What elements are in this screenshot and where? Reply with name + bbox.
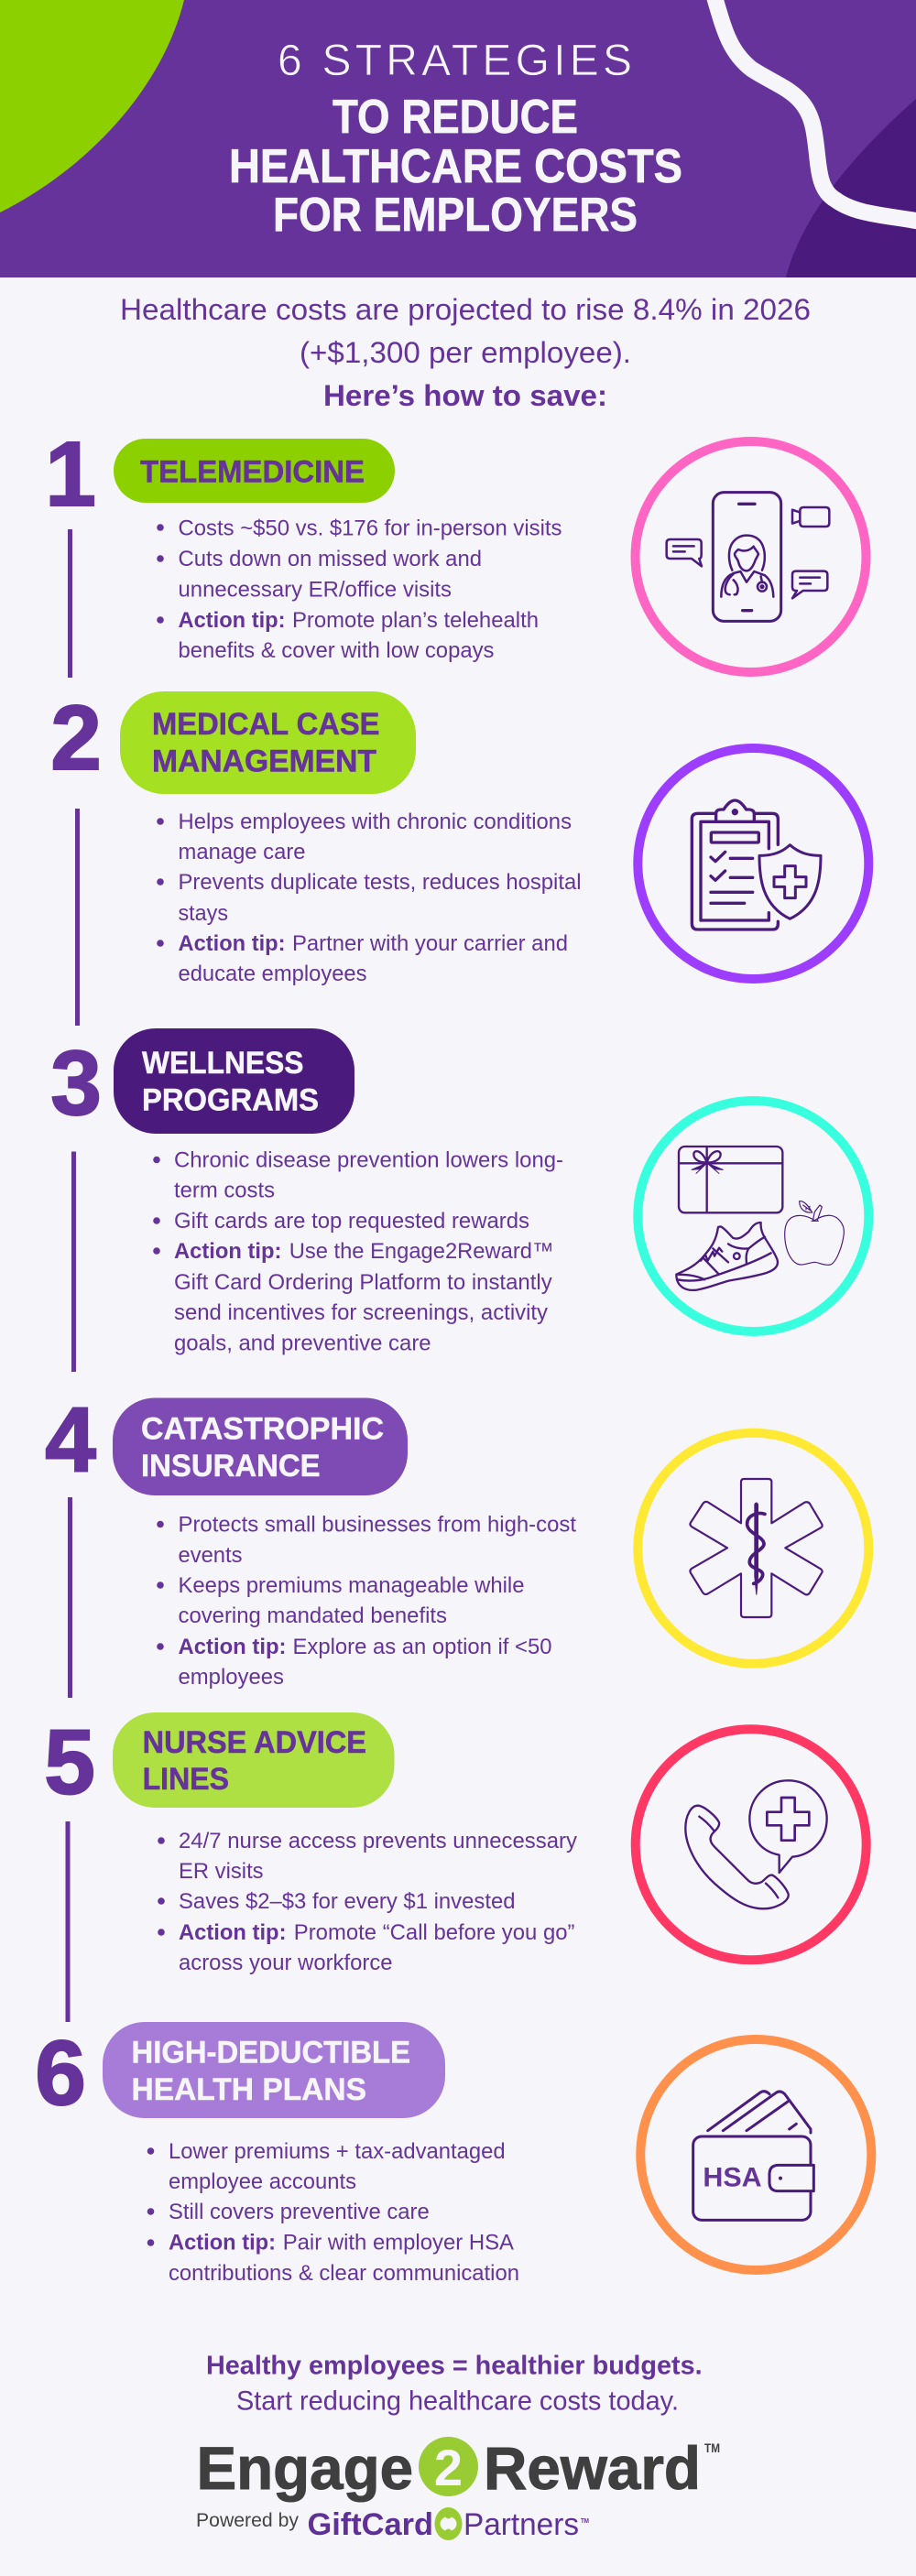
panel: strategy 6 high-deductible health plans [35,2022,871,2286]
logo: powered by GiftCard Partners: GiftCard [308,2507,433,2542]
bullet list 4: events [178,1543,242,1568]
bullet list 2 [157,810,581,986]
heading pill: catastrophic insurance: CATASTROPHIC [141,1412,384,1447]
bullet list 3: Chronic disease prevention lowers long- [174,1148,563,1172]
bullet list 5: ER visits [179,1859,264,1884]
bullet list 4: covering mandated benefits [178,1603,447,1628]
bullet list 4 [157,1513,576,1690]
bullet list 2: Partner with your carrier and [292,931,568,956]
icon: telephone and medical speech bubble in red ring [636,1729,867,1960]
decorative dark purple curve [786,99,916,277]
bullet list 6: Pair with employer HSA [283,2231,515,2255]
bullet list 4: Action tip: [178,1635,286,1659]
heading pill: wellness programs: PROGRAMS [142,1082,319,1117]
bullet list 4: Protects small businesses from high-cost [178,1513,576,1537]
decorative white wave [713,0,916,222]
heading pill: catastrophic insurance [113,1397,408,1495]
title: 6 STRATEGIES [278,37,632,85]
bullet list 1: benefits & cover with low copays [178,638,495,663]
bullet list 5 [158,1829,578,1975]
icon: clipboard and shield in purple ring [638,748,868,979]
bullet list 3: term costs [174,1178,275,1203]
title: TO REDUCE [333,91,578,144]
bullet list 3: Use the Engage2Reward™ [289,1239,554,1264]
bullet list 3: Gift Card Ordering Platform to instantly [174,1270,552,1295]
bullet list 1 [157,516,562,663]
bullet list 3: Action tip: [174,1239,281,1264]
bullet list 6: Still covers preventive care [169,2200,430,2224]
closing text: Start reducing healthcare costs today. [236,2386,679,2417]
icon: HSA wallet in orange ring: HSA [703,2163,762,2193]
heading pill: medical case management: MEDICAL CASE [152,707,379,742]
title [229,37,682,242]
logo: Engage2Reward: Reward [484,2434,701,2502]
icon: gift card, shoe and apple in teal ring [638,1101,868,1331]
bullet list 2: educate employees [178,962,366,986]
heading pill: wellness programs: WELLNESS [142,1046,304,1081]
panel: strategy 1 telemedicine [45,423,867,678]
logo: Engage2Reward: 2 [434,2439,463,2496]
bullet list 3: send incentives for screenings, activity [174,1300,549,1325]
bullet list 1: unnecessary ER/office visits [178,577,452,603]
heading pill: telemedicine [114,439,395,503]
logo: powered by GiftCard Partners: Partners [463,2507,579,2542]
bullet list 5: Promote “Call before you go” [294,1920,575,1945]
logo: powered by GiftCard Partners: TM [581,2518,589,2525]
number 4: 4 [45,1388,96,1491]
heading pill: telemedicine: TELEMEDICINE [140,454,365,489]
bullet list 2: Prevents duplicate tests, reduces hospital [178,870,581,895]
bullet list 1: Cuts down on missed work and [178,547,482,571]
bullet list 4: Explore as an option if <50 [293,1635,551,1659]
bullet list 6: Action tip: [169,2231,276,2255]
bullet list 4: employees [178,1665,284,1690]
connector line 4 [68,1497,72,1698]
bullet list 5: Action tip: [179,1920,286,1945]
number 2: 2 [50,687,102,789]
decorative green blob [0,0,184,212]
heading pill: catastrophic insurance: INSURANCE [141,1449,321,1484]
heading pill: nurse advice lines [113,1712,394,1808]
number 1: 1 [45,423,96,526]
bullet list 6 [147,2139,519,2286]
heading pill: high-deductible health plans [103,2022,445,2118]
connector line 2 [75,809,80,1026]
bullet list 6: contributions & clear communication [169,2261,519,2286]
closing text: Healthy employees = healthier budgets. [206,2352,703,2381]
bullet list 2: manage care [178,840,306,864]
panel: strategy 4 catastrophic insurance [45,1388,868,1698]
heading pill: medical case management: MANAGEMENT [152,744,376,778]
panel: strategy 5 nurse advice lines [44,1711,867,2022]
heading pill: nurse advice lines: LINES [143,1762,229,1797]
bullet list 1: Costs ~$50 vs. $176 for in-person visits [178,516,562,540]
intro text: Healthcare costs are projected to rise 8.4% in 2026 [120,293,811,326]
bullet list 3: Gift cards are top requested rewards [174,1209,529,1234]
icon: star of life in yellow ring [638,1433,868,1664]
header banner [0,0,916,277]
heading pill: wellness programs [114,1028,354,1134]
logo: Engage2Reward: Engage [196,2434,413,2502]
bullet list 3 [153,1148,563,1355]
heading pill: medical case management [120,691,416,794]
logo: powered by GiftCard Partners: Powered by [196,2510,299,2531]
icon: HSA wallet in orange ring [640,2039,871,2270]
panel: strategy 2 medical case management [50,687,868,1026]
number 5: 5 [44,1711,95,1813]
icon: doctor on phone in pink ring [636,441,867,672]
heading pill: high-deductible health plans: HEALTH PLANS [132,2072,366,2107]
bullet list 2: stays [178,901,228,926]
title: FOR EMPLOYERS [273,189,638,242]
closing text [206,2352,703,2417]
logo: Engage2Reward: TM [704,2440,720,2455]
bullet list 2: Action tip: [178,931,286,956]
heading pill: nurse advice lines: NURSE ADVICE [143,1725,366,1760]
logo: powered by GiftCard Partners [196,2507,589,2542]
bullet list 1: Promote plan’s telehealth [292,608,539,633]
intro text: Here’s how to save: [323,379,607,412]
bullet list 5: 24/7 nurse access prevents unnecessary [179,1829,578,1853]
bullet list 3: goals, and preventive care [174,1331,431,1355]
bullet list 4: Keeps premiums manageable while [178,1573,524,1598]
intro text [120,293,811,412]
number 3: 3 [50,1032,102,1135]
intro text: (+$1,300 per employee). [300,336,631,369]
bullet list 1: Action tip: [178,608,286,633]
number 6: 6 [35,2022,86,2125]
bullet list 5: Saves $2–$3 for every $1 invested [179,1889,515,1914]
connector line 1 [68,529,72,678]
bullet list 6: employee accounts [169,2169,356,2194]
logo: Engage2Reward [196,2434,720,2502]
bullet list 6: Lower premiums + tax-advantaged [169,2139,506,2164]
bullet list 2: Helps employees with chronic conditions [178,810,572,834]
panel: strategy 3 wellness programs [50,1028,868,1372]
connector line 5 [66,1821,70,2022]
title: HEALTHCARE COSTS [229,140,682,193]
connector line 3 [71,1152,76,1372]
bullet list 5: across your workforce [179,1951,393,1975]
heading pill: high-deductible health plans: HIGH-DEDUCTIBLE [132,2036,410,2071]
